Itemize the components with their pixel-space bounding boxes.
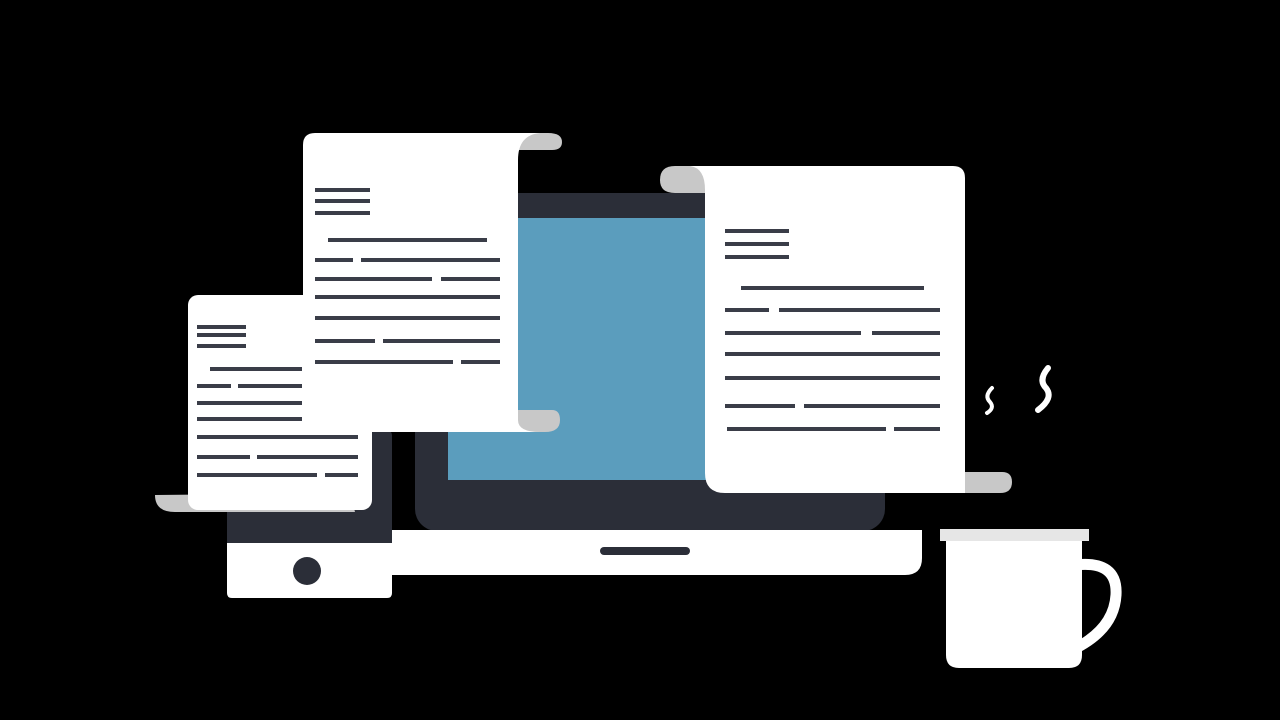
laptop bbox=[390, 193, 922, 575]
paper: right bbox=[660, 166, 1012, 493]
steam bbox=[987, 368, 1049, 413]
paper: middle bbox=[303, 133, 562, 432]
paper: small left bbox=[155, 295, 372, 512]
phone bbox=[227, 430, 392, 598]
mug bbox=[940, 529, 1116, 668]
